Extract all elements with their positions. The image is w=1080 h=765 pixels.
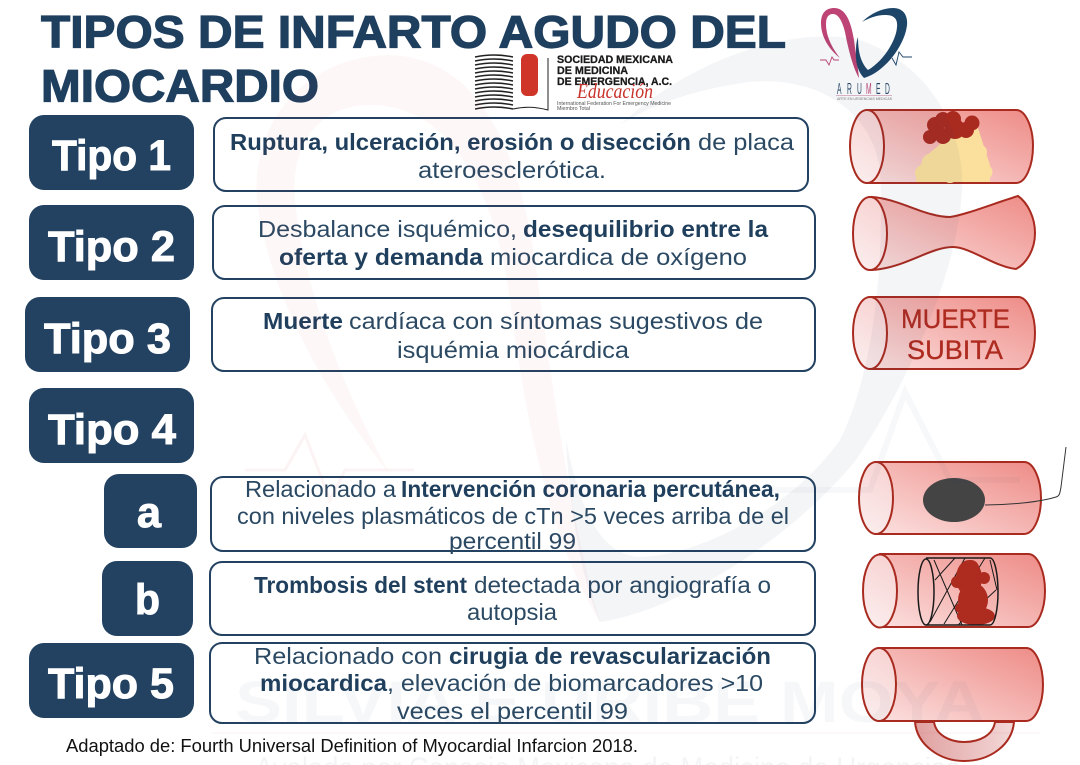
label: Tipo 2: Tipo 2 [48, 223, 175, 271]
description: Tipo 4b [210, 562, 815, 635]
description: Tipo 4b: detectada por angiografía o [474, 572, 771, 598]
row: Tipo 3 [25, 297, 1035, 372]
description: Tipo 4a: con niveles plasmáticos de cTn >5 veces arriba de el [237, 503, 789, 529]
icon: artery with stent thrombosis [863, 554, 1045, 628]
description: Tipo 5 [210, 643, 815, 724]
logo: ARUMED: ARTE EN URGENCIAS MEDICAS [837, 97, 893, 101]
label: Tipo 1: Tipo 1 [52, 132, 171, 180]
row: Tipo 4a [104, 447, 1066, 554]
title: MIOCARDIO [41, 60, 319, 112]
icon: artery with surgical bypass [862, 648, 1043, 761]
description: Tipo 2: desequilibrio entre la [523, 216, 768, 242]
logo: ARUMED: R [847, 80, 852, 98]
description: Tipo 5: Relacionado con [254, 643, 442, 669]
description: Tipo 3: isquémia miocárdica [397, 337, 629, 363]
description: Tipo 4a [211, 476, 815, 554]
logo: ARUMED: D [885, 80, 890, 98]
icon: narrowed artery [853, 196, 1035, 270]
label: Tipo 2 [29, 205, 194, 280]
label: Tipo 4: Tipo 4 [48, 406, 176, 454]
description: Tipo 4b: autopsia [467, 599, 557, 625]
row: Tipo 4b [102, 554, 1045, 636]
description: Tipo 3 [212, 298, 815, 371]
description: Tipo 2: Desbalance isquémico, [258, 216, 517, 242]
description: Tipo 2: miocardica de oxígeno [490, 244, 747, 270]
logo: Sociedad Mexicana de Medicina de Emergencia: Educación [576, 79, 653, 103]
description: Tipo 5: cirugia de revascularización [449, 643, 771, 669]
label: Tipo 5: Tipo 5 [48, 660, 174, 708]
logo: Sociedad Mexicana de Medicina de Emergencia: Miembro Total [557, 106, 590, 112]
description: Tipo 5: miocardica [260, 670, 387, 696]
description: Tipo 2 [213, 206, 815, 279]
description: Tipo 1: ateroesclerótica. [418, 157, 606, 183]
description: Tipo 4b: Trombosis del stent [254, 572, 467, 598]
label: a [104, 474, 197, 548]
label: Tipo 3 [25, 297, 190, 372]
description: Tipo 1: Ruptura, ulceración, erosión o disección [230, 129, 691, 155]
label: b [102, 561, 193, 636]
label: Tipo 1 [29, 115, 194, 190]
label: Tipo 3: Tipo 3 [44, 315, 171, 363]
row: Tipo 5 [29, 643, 1043, 761]
label: Tipo 4 [29, 388, 194, 463]
description: Tipo 4a: percentil 99 [449, 528, 576, 554]
logo: Sociedad Mexicana de Medicina de Emergencia: DE EMERGENCIA, A.C. [557, 76, 672, 88]
logo: Sociedad Mexicana de Medicina de Emergencia [475, 54, 673, 112]
logo: ARUMED: E [876, 80, 880, 98]
description: Tipo 3: cardíaca con síntomas sugestivos de [349, 308, 763, 334]
title [41, 6, 786, 112]
row: Tipo 1 [29, 110, 1033, 191]
description: Tipo 1 [214, 118, 808, 191]
logo: ARUMED [820, 8, 912, 101]
description: Tipo 5: , elevación de biomarcadores >10 [387, 670, 763, 696]
watermark: SILVIA E URIBE MOYA [235, 670, 985, 735]
title: TIPOS DE INFARTO AGUDO DEL [41, 6, 786, 58]
logo: Sociedad Mexicana de Medicina de Emergencia: International Federation For Emergency Medicine [557, 101, 671, 107]
description: Tipo 5: veces el percentil 99 [397, 698, 628, 724]
description: Tipo 4a: Intervención coronaria percutánea, [401, 476, 780, 502]
description: Tipo 2: oferta y demanda [279, 244, 483, 270]
logo: Sociedad Mexicana de Medicina de Emergencia: DE MEDICINA [557, 65, 628, 77]
logo: ARUMED: A [837, 80, 842, 98]
label: b: b [135, 576, 160, 624]
watermark [212, 37, 1040, 765]
icon: artery labelled sudden death [853, 297, 1035, 369]
description: Tipo 1: de placa [698, 129, 794, 155]
row: Tipo 2 [29, 196, 1035, 280]
icon: artery with ruptured plaque [850, 110, 1033, 183]
label: a: a [137, 489, 162, 537]
logo: Sociedad Mexicana de Medicina de Emergencia: SOCIEDAD MEXICANA [557, 54, 673, 66]
footnote: Adaptado de: Fourth Universal Definition of Myocardial Infarcion 2018. [66, 736, 638, 756]
logo: ARUMED: U [857, 80, 862, 98]
logo: ARUMED: M [866, 80, 872, 98]
icon: artery with balloon and guide wire [859, 447, 1066, 534]
icon: artery labelled sudden death: SUBITA [907, 335, 1003, 365]
label: Tipo 5 [29, 643, 194, 718]
description: Tipo 4a: Relacionado a [245, 476, 396, 502]
icon: artery labelled sudden death: MUERTE [901, 304, 1010, 334]
description: Tipo 3: Muerte [263, 308, 343, 334]
